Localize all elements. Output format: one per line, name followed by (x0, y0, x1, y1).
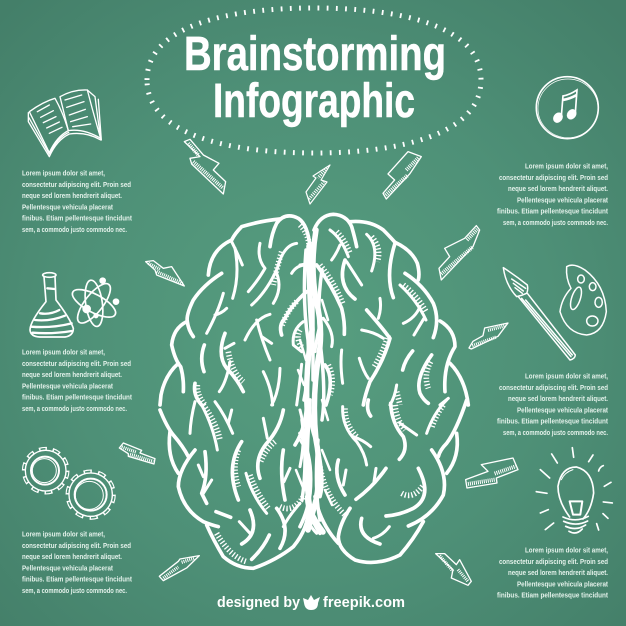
text block: idea: Lorem ipsum dolor sit amet, (525, 546, 608, 554)
text block: music: Pellentesque vehicula placerat (517, 195, 608, 204)
text block: gears: Pellentesque vehicula placerat (22, 563, 113, 572)
bolt: bottom right (436, 554, 471, 585)
footer credit: designed by (217, 595, 300, 611)
text block: gears: Lorem ipsum dolor sit amet, (22, 530, 105, 538)
text block: art: finibus. Etiam pellentesque tincidunt (497, 417, 608, 426)
text block: science: neque sed lorem hendrerit aliquet. (22, 370, 122, 379)
text block: book: finibus. Etiam pellentesque tincidunt (22, 214, 132, 223)
text block: book: sem, a commodo justo commodo nec. (22, 225, 127, 234)
text block: book: consectetur adipiscing elit. Proin sed (22, 180, 131, 189)
text block: book: neque sed lorem hendrerit aliquet. (22, 191, 122, 200)
bolt: bottom left (159, 556, 199, 581)
text block: music: neque sed lorem hendrerit aliquet. (508, 184, 608, 193)
text block: gears: consectetur adipiscing elit. Proin sed (22, 541, 131, 550)
lightning bolts (119, 139, 518, 585)
icon: freepik logo (303, 595, 320, 610)
bolt: top right (383, 152, 421, 199)
brain: upper left hemisphere (160, 216, 310, 405)
text block: gears: neque sed lorem hendrerit aliquet. (22, 552, 122, 561)
text block: science: Lorem ipsum dolor sit amet, (22, 348, 105, 356)
title: Infographic (213, 75, 415, 128)
brain: lower left hemisphere (160, 400, 320, 568)
footer credit (217, 595, 405, 611)
icon: flask and atom (30, 273, 119, 337)
brain: lower right hemisphere (300, 400, 467, 562)
icon: open book (28, 90, 101, 157)
icon: gears (24, 449, 114, 518)
dotted title frame (147, 8, 481, 153)
text block: book: Lorem ipsum dolor sit amet, (22, 168, 105, 178)
text block: book: Pellentesque vehicula placerat (22, 202, 113, 211)
text block: art: neque sed lorem hendrerit aliquet. (508, 394, 608, 403)
text block: science: finibus. Etiam pellentesque tincidunt (22, 393, 132, 402)
bolt: right lower (466, 458, 518, 488)
icon: light bulb (536, 448, 612, 533)
text block: gears: finibus. Etiam pellentesque tincidunt (22, 575, 132, 584)
icon: paint brush and palette (503, 265, 606, 360)
bolt: left upper (146, 261, 184, 286)
brain: central fissure (296, 230, 332, 532)
brain: upper right hemisphere (300, 214, 468, 405)
text block: idea: finibus. Etiam pellentesque tincidunt (497, 591, 608, 600)
icon: music note (536, 77, 598, 139)
text block: music: Lorem ipsum dolor sit amet, (525, 162, 608, 170)
bolt: right middle (469, 323, 508, 349)
bolt: left lower (119, 443, 155, 464)
text block: gears (22, 530, 132, 595)
text block: gears: sem, a commodo justo commodo nec. (22, 586, 127, 595)
text block: art: Lorem ipsum dolor sit amet, (525, 372, 608, 380)
text block: science: consectetur adipiscing elit. Proin sed (22, 359, 131, 368)
bolt: top left (184, 139, 226, 194)
text block: idea: neque sed lorem hendrerit aliquet. (508, 568, 608, 577)
title: Brainstorming (184, 28, 446, 81)
text block: science: Pellentesque vehicula placerat (22, 381, 113, 390)
brain illustration (160, 214, 468, 568)
text block: idea: Pellentesque vehicula placerat (517, 579, 608, 588)
text block: science: sem, a commodo justo commodo nec. (22, 404, 127, 413)
text block: art: Pellentesque vehicula placerat (517, 405, 608, 414)
text block: idea (497, 546, 608, 600)
footer credit: freepik.com (323, 595, 405, 611)
text block: art (497, 372, 608, 437)
title (184, 28, 446, 128)
text block: music: finibus. Etiam pellentesque tincidunt (497, 207, 608, 216)
text block: book (22, 168, 132, 234)
bolt: right upper (439, 226, 480, 280)
text block: science (22, 348, 132, 413)
text block: music (497, 162, 608, 227)
bolt: top centre (306, 165, 330, 204)
